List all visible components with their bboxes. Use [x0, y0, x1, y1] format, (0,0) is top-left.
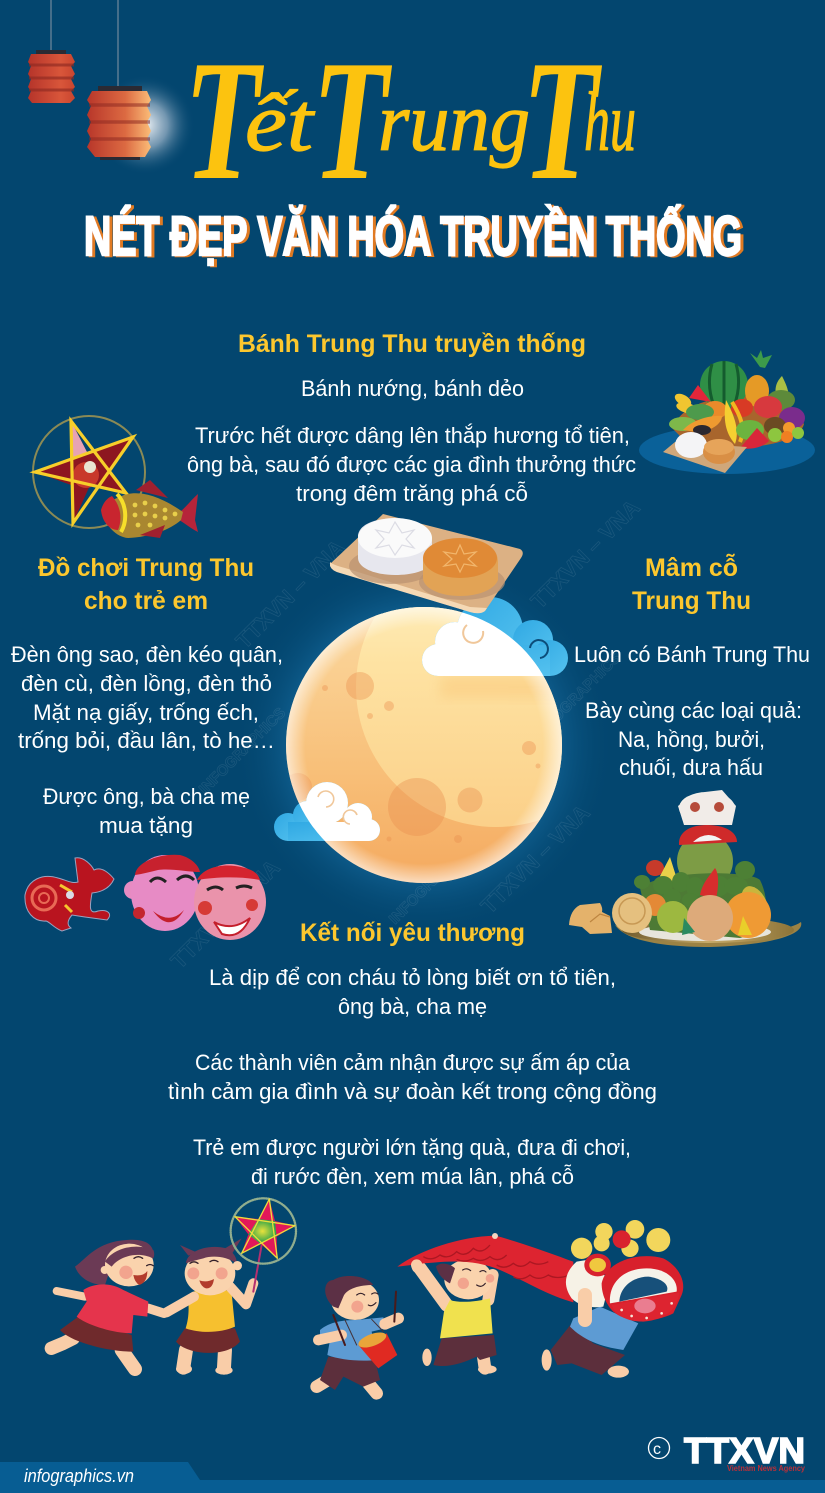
- text block: connection: Các thành viên cảm nhận được sự ấm áp của: [195, 1050, 631, 1075]
- icon: fruit platter with mooncakes: [639, 350, 815, 474]
- agency watermarks: [166, 495, 645, 974]
- icon: star lantern and fish lantern: [33, 416, 198, 538]
- heading: Đồ chơi Trung Thu: Đồ chơi Trung Thu: [38, 554, 254, 582]
- text block: feast tray: Bày cùng các loại quả:: [585, 698, 802, 723]
- illustration: boy under lion head: [542, 1307, 638, 1378]
- logo: copyright and TTXVN: TTXVN: [684, 1430, 805, 1471]
- moon halo: [234, 555, 614, 935]
- illustration: girl with star lantern: [167, 1198, 296, 1375]
- text block: mooncake description: ông bà, sau đó được các gia đình thưởng thức: [187, 452, 636, 477]
- text block: feast tray: Na, hồng, bưởi,: [618, 727, 765, 752]
- title: Tết Trung Thu: T: [522, 26, 602, 216]
- agency watermarks: TTXVN – VNA: [231, 535, 350, 654]
- footer text: infographics.vn: [24, 1466, 134, 1486]
- heading: Mâm cỗ Trung Thu: Trung Thu: [632, 587, 751, 615]
- text block: feast tray: [574, 642, 810, 780]
- agency watermarks: INFOGRAPHICS: [196, 704, 289, 798]
- text block: toys: Đèn ông sao, đèn kéo quân,: [11, 642, 283, 667]
- illustration: lion dance head: [566, 1220, 683, 1322]
- text block: mooncake description: Bánh nướng, bánh dẻo: [301, 376, 524, 401]
- title: Tết Trung Thu: rung: [378, 76, 530, 169]
- text block: mooncake description: [187, 376, 636, 506]
- text block: mooncake description: Trước hết được dâng lên thắp hương tổ tiên,: [195, 423, 630, 448]
- illustration: girl in red shirt: [51, 1240, 164, 1369]
- text block: connection: [168, 965, 657, 1189]
- text block: toys: Mặt nạ giấy, trống ếch,: [33, 700, 259, 725]
- text block: toys: trống bỏi, đầu lân, tò he…: [18, 728, 275, 753]
- icon: feast tray with fruit: [569, 790, 801, 947]
- text block: toys: mua tặng: [99, 813, 193, 838]
- title: Tết Trung Thu: hu: [584, 76, 636, 169]
- icon: paper rabbit lantern: [25, 858, 114, 931]
- illustration: dragon cloth: [397, 1233, 573, 1302]
- agency watermarks: TTXVN – VNA: [476, 800, 595, 919]
- text block: toys: Được ông, bà cha mẹ: [43, 784, 250, 809]
- agency watermarks: TTXVN – VNA: [526, 495, 645, 614]
- heading: Mâm cỗ Trung Thu: Mâm cỗ: [645, 552, 738, 582]
- text block: connection: Là dịp để con cháu tỏ lòng biết ơn tổ tiên,: [209, 965, 616, 990]
- heading: Kết nối yêu thương: Kết nối yêu thương: [300, 919, 525, 947]
- heading: Đồ chơi Trung Thu: [38, 554, 254, 615]
- logo: copyright and TTXVN: Vietnam News Agency: [727, 1464, 806, 1473]
- text block: mooncake description: trong đêm trăng phá cỗ: [296, 481, 528, 506]
- title: Tết Trung Thu: ết: [245, 76, 316, 169]
- agency watermarks: INFOGRAPHICS: [531, 649, 624, 743]
- title: Tết Trung Thu: T: [184, 26, 264, 216]
- text block: toys: [11, 642, 283, 838]
- text block: connection: tình cảm gia đình và sự đoàn kết trong cộng đồng: [168, 1079, 657, 1104]
- text block: feast tray: chuối, dưa hấu: [619, 755, 763, 780]
- agency watermarks: INFOGRAPHICS: [386, 834, 479, 928]
- text block: connection: ông bà, cha mẹ: [338, 994, 487, 1019]
- title: Tết Trung Thu: [184, 26, 636, 216]
- icon: top cloud: [422, 597, 568, 676]
- text block: feast tray: Luôn có Bánh Trung Thu: [574, 642, 810, 667]
- illustration: boy holding dragon body: [412, 1259, 497, 1374]
- illustration: boy with drum: [317, 1276, 398, 1393]
- moon: [286, 607, 562, 883]
- logo: copyright and TTXVN: c: [653, 1441, 661, 1458]
- text block: toys: đèn cù, đèn lồng, đèn thỏ: [21, 671, 272, 696]
- footer band: [0, 1462, 825, 1493]
- heading: Bánh Trung Thu truyền thống: Bánh Trung Thu truyền thống: [238, 330, 586, 358]
- text block: connection: Trẻ em được người lớn tặng quà, đưa đi chơi,: [193, 1135, 631, 1160]
- icon: glowing lantern: [87, 0, 195, 175]
- heading: Đồ chơi Trung Thu: cho trẻ em: [84, 587, 208, 615]
- heading: Mâm cỗ Trung Thu: [632, 552, 751, 615]
- decorative craters: [284, 672, 540, 843]
- icon: small hanging lantern: [28, 0, 75, 103]
- icon: lower cloud: [274, 782, 380, 841]
- title: Tết Trung Thu: T: [312, 26, 392, 216]
- icon: mooncakes on tray: [330, 514, 523, 613]
- text block: connection: đi rước đèn, xem múa lân, phá cỗ: [251, 1164, 574, 1189]
- icon: paper masks: [124, 855, 266, 940]
- agency watermarks: TTXVN – VNA: [166, 855, 285, 974]
